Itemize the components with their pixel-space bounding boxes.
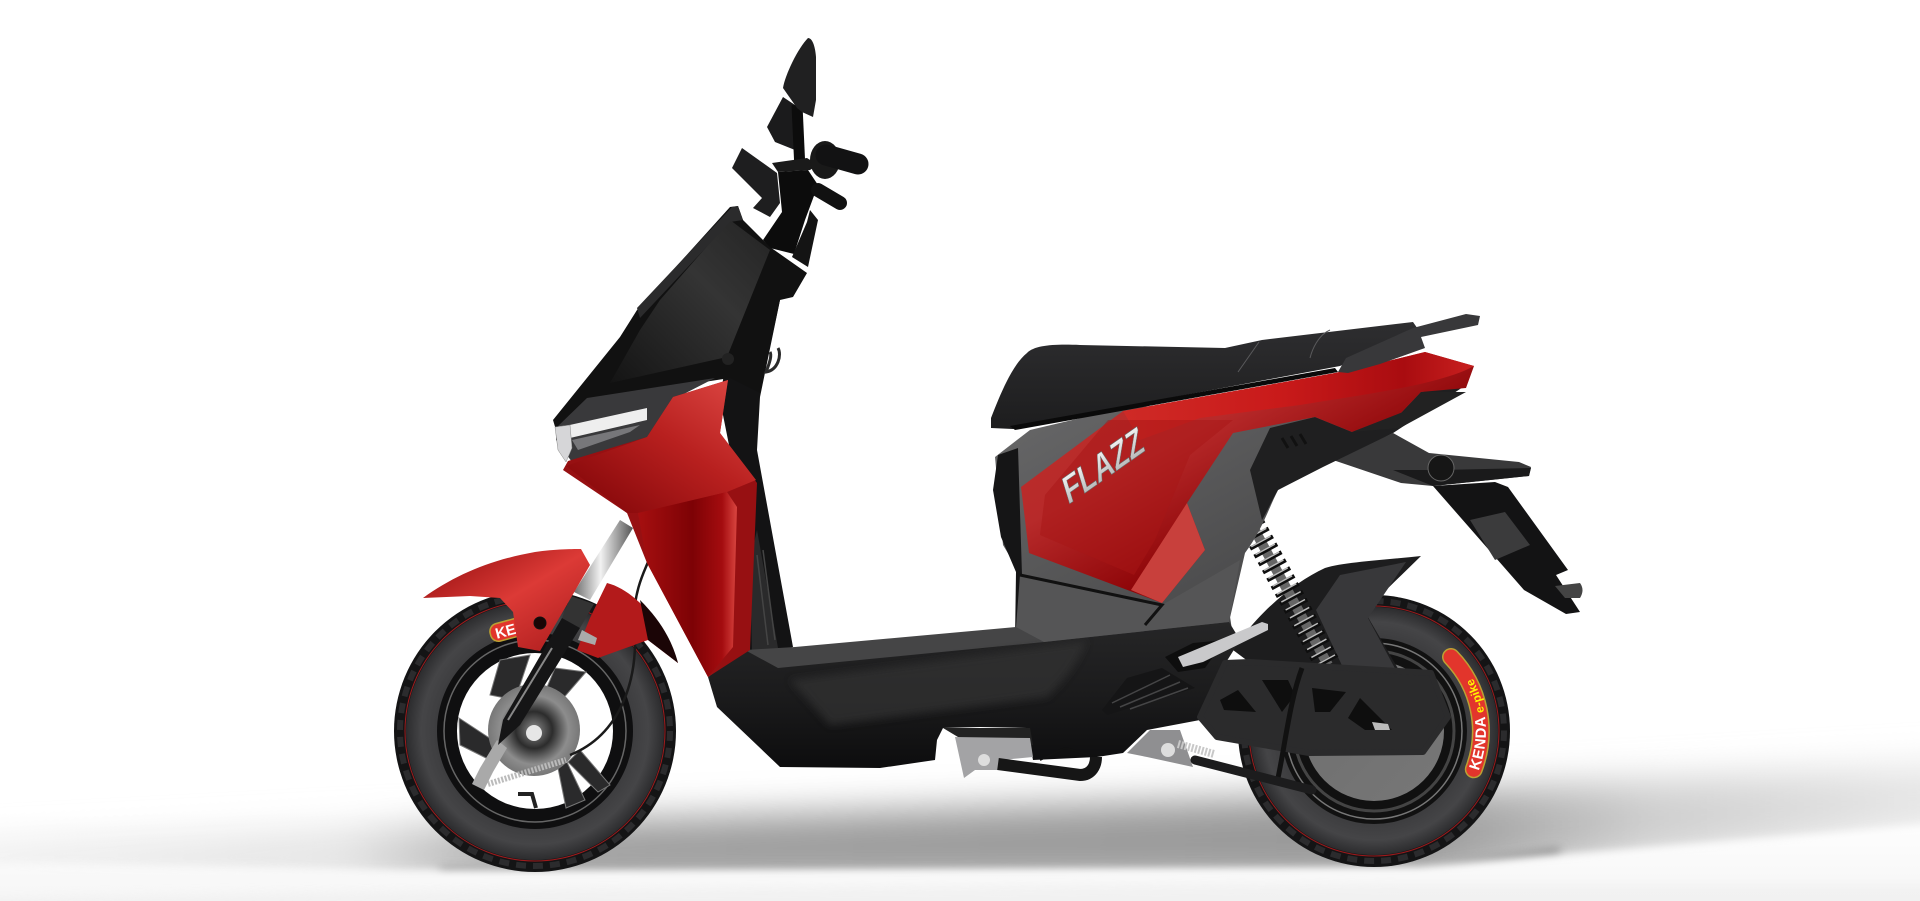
- cable loop: [1278, 668, 1302, 778]
- kickstand hook in wheel: [518, 794, 536, 808]
- front red body: [563, 380, 757, 677]
- dark body cutline: [1020, 575, 1162, 625]
- front wheel: [394, 562, 676, 872]
- fairing face: [610, 220, 770, 383]
- ribbed vent: [1102, 668, 1195, 715]
- front tyre KENDA label: KEN: [493, 618, 528, 643]
- front brake drum: [488, 684, 580, 776]
- fork highlight: [508, 648, 552, 720]
- upper facet: [566, 380, 756, 513]
- display unit: [732, 148, 780, 217]
- handlebar assembly: [732, 38, 858, 267]
- hook: [766, 348, 780, 372]
- footpeg: [1165, 622, 1268, 672]
- rear tyre KENDA e-pike label: [1442, 648, 1490, 778]
- steering column mass: [763, 170, 818, 254]
- tail light cover: [1352, 372, 1470, 432]
- rear tyre: [1238, 595, 1510, 867]
- side stand: [1127, 730, 1312, 790]
- front section: [423, 549, 590, 651]
- rear tyre KENDA e-pike label: KENDA e-pike: [1468, 679, 1486, 770]
- cover vents: [1220, 680, 1392, 730]
- licence plate holder: [1433, 482, 1582, 614]
- front strut black: [720, 300, 793, 660]
- front tyre: [394, 590, 676, 872]
- headlight lens: [555, 425, 572, 462]
- swingarm cover: [1200, 662, 1448, 778]
- rear body dark sweep: [1250, 385, 1466, 520]
- stanchion: [574, 520, 633, 600]
- glare strip: [637, 206, 743, 318]
- side panel facet: [1040, 420, 1233, 575]
- headlight lower: [572, 425, 640, 450]
- fork lug: [578, 630, 597, 645]
- fork lower leg: [498, 618, 580, 745]
- front mudguard: [423, 549, 678, 663]
- cover vent inner light: [1372, 722, 1390, 730]
- front mirror: [783, 38, 816, 117]
- grab rail: [1338, 314, 1480, 373]
- rear section: [577, 583, 678, 663]
- FLAZZ logo: FLAZZ: [1058, 418, 1148, 513]
- fastener: [722, 353, 734, 365]
- centre stand: [943, 728, 1096, 778]
- underbody highlight: [790, 641, 1087, 725]
- carrier bolt: [1428, 455, 1454, 481]
- fork collar: [562, 596, 594, 628]
- grey floor trim: [745, 610, 1232, 672]
- grip: [826, 155, 858, 164]
- rear rim and hub disc: [1281, 638, 1467, 824]
- front axle: [526, 725, 542, 741]
- head bracket: [792, 210, 818, 267]
- side vent: [1282, 434, 1306, 448]
- floor and underbody: [708, 560, 1268, 768]
- black outer shell: [553, 206, 807, 430]
- headlight housing: [556, 378, 715, 462]
- headlight strip: [556, 408, 647, 438]
- front spokes: [459, 655, 610, 808]
- front fork: [562, 520, 633, 628]
- grip barrel: [810, 141, 840, 179]
- lever: [818, 190, 840, 203]
- seat: [991, 322, 1420, 430]
- red side panel and tail band: [1021, 352, 1474, 603]
- rear mudguard: [1233, 556, 1421, 700]
- cluster clamp: [772, 158, 818, 172]
- fender bolt: [534, 617, 546, 629]
- background and floor shadow: [0, 756, 1920, 901]
- front fairing: [553, 206, 807, 462]
- lower facet: [638, 492, 737, 677]
- rear shock absorber: [1252, 525, 1328, 665]
- panel lower right highlight: [1131, 503, 1205, 603]
- front dark strip on body: [993, 448, 1030, 640]
- rear mirror: [767, 97, 798, 150]
- rear wheel: [1238, 595, 1510, 867]
- rear carrier bracket: [1333, 433, 1531, 486]
- grey lower body: [1016, 560, 1240, 642]
- black underbody: [708, 622, 1240, 768]
- rear mudguard arm: [1316, 562, 1406, 674]
- brake arm: [472, 740, 507, 790]
- rear body grey shell: [995, 385, 1466, 645]
- front rim: [437, 633, 633, 829]
- mirror stalk: [797, 105, 800, 170]
- brake spring and cable: [488, 562, 648, 784]
